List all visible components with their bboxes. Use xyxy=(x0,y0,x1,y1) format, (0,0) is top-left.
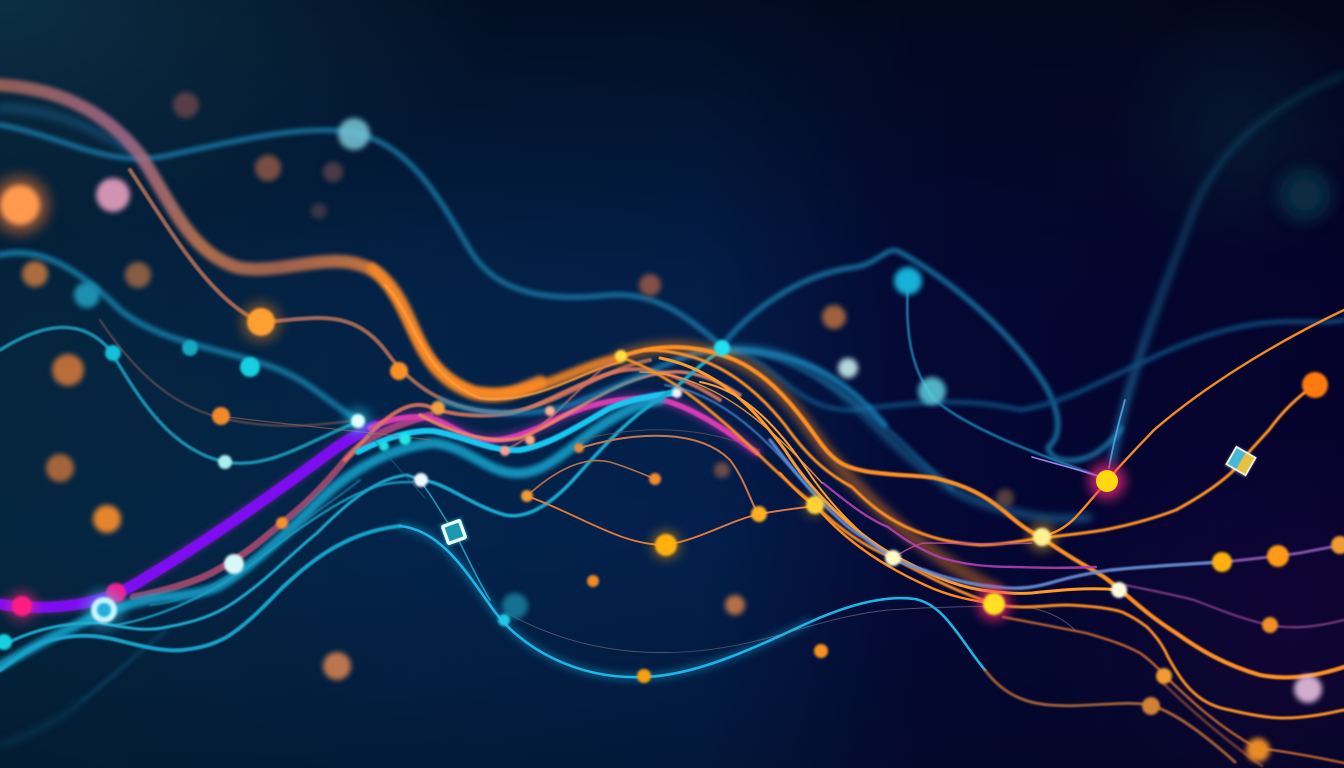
glowing orange and pink nodes on the left xyxy=(0,118,445,621)
square marker left xyxy=(439,517,469,547)
glowing purple strand xyxy=(0,398,757,608)
thick blurred pink-orange band xyxy=(0,85,650,412)
square marker right xyxy=(1225,445,1257,477)
salmon strand beside the purple strand xyxy=(133,415,430,597)
central orange nodes xyxy=(500,350,828,683)
blurred background nodes xyxy=(22,92,1331,680)
bright yellow nodes on the right xyxy=(804,372,1344,762)
bottom cyan curve xyxy=(400,526,1235,762)
salmon strands through the centre xyxy=(345,360,740,460)
cyan and white nodes on the left xyxy=(0,282,510,650)
main orange river to the right xyxy=(620,310,1344,766)
central thin orange filaments xyxy=(220,416,815,545)
cyan and white nodes in the centre-right xyxy=(672,267,946,405)
cyan strand bundle on the left xyxy=(0,349,885,670)
